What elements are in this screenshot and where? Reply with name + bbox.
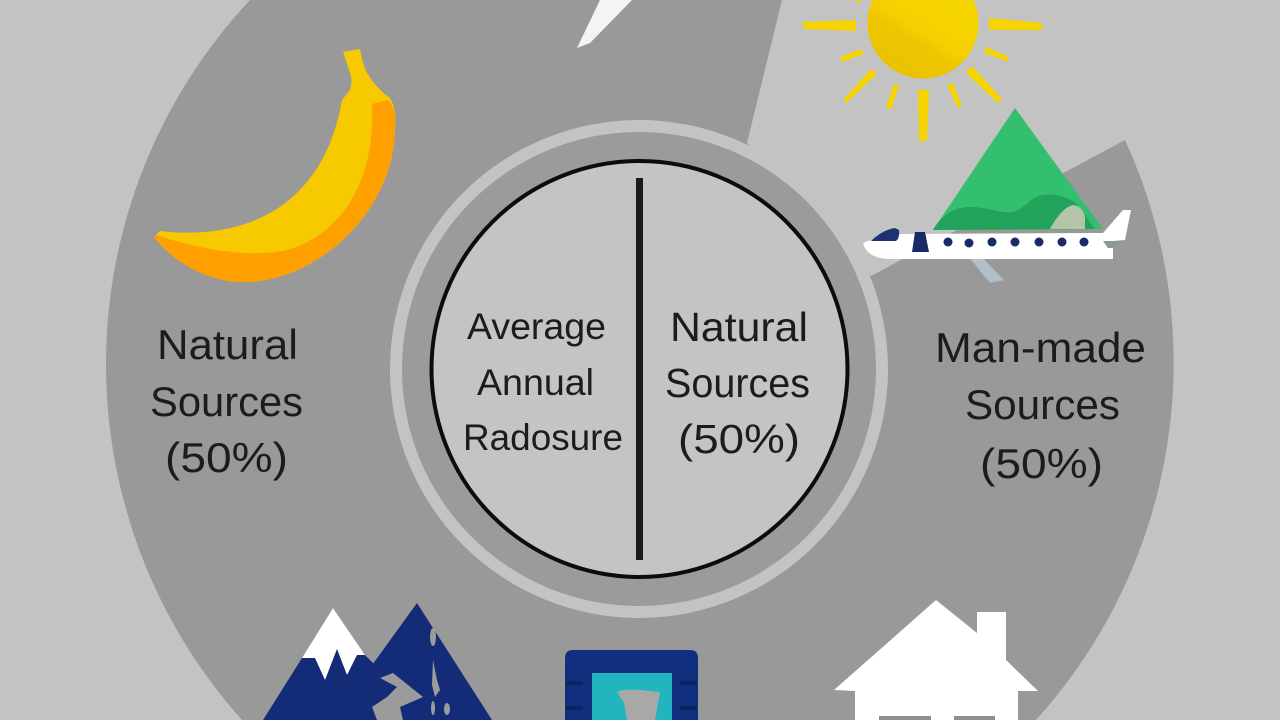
centre right label: Natural: [670, 304, 808, 350]
centre left label: Average: [467, 306, 606, 347]
icon: sun: [802, 0, 1042, 141]
icon: blue device: [565, 650, 698, 720]
right label: man-made sources: Sources: [965, 381, 1120, 428]
right label: man-made sources: [935, 324, 1146, 487]
left label: natural sources: Natural: [157, 321, 298, 368]
centre right label: Sources: [665, 360, 810, 406]
right label: man-made sources: (50%): [980, 440, 1103, 487]
icon: house: [834, 600, 1038, 720]
centre left label: Radosure: [463, 417, 623, 458]
left label: natural sources: (50%): [165, 434, 288, 481]
icon: airplane: [863, 210, 1131, 283]
icon: snowy mountains: [263, 603, 492, 720]
left label: natural sources: [150, 321, 303, 481]
icon: lightning bolt: [577, 0, 632, 48]
centre left label: [463, 306, 623, 458]
icon: green mountain: [933, 108, 1103, 230]
central dial: [390, 120, 888, 618]
left label: natural sources: Sources: [150, 378, 303, 425]
icon: banana: [154, 49, 395, 282]
centre right label: (50%): [678, 416, 800, 462]
centre left label: Annual: [477, 362, 594, 403]
centre right label: [665, 304, 810, 462]
right label: man-made sources: Man-made: [935, 324, 1146, 371]
